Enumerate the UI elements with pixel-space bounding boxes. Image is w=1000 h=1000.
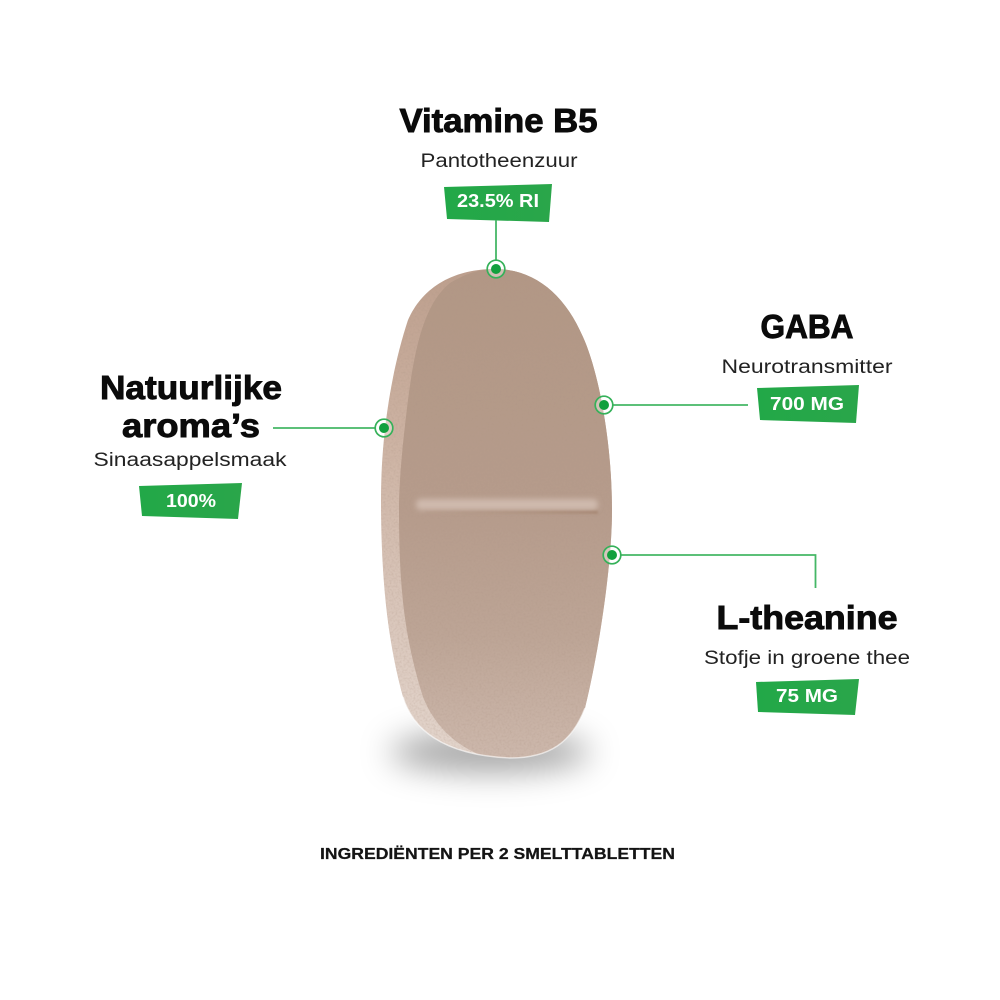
callout: L-theanine	[603, 546, 910, 715]
tablet shadow	[390, 732, 590, 772]
connector	[612, 404, 748, 406]
marker	[595, 396, 613, 414]
heading: Vitamine B5	[400, 102, 598, 139]
tablet grain	[381, 269, 612, 758]
tablet edge	[381, 269, 612, 758]
badge value: 100%	[166, 491, 216, 511]
subheading: Pantotheenzuur	[420, 151, 578, 172]
callout: GABA	[595, 308, 893, 423]
badge	[757, 385, 859, 423]
badge	[139, 483, 242, 519]
badge value: 23.5% RI	[457, 191, 539, 211]
badge	[756, 679, 859, 715]
tablet	[381, 269, 612, 772]
subheading: Stofje in groene thee	[704, 648, 910, 669]
subheading: Neurotransmitter	[722, 357, 893, 378]
callout: Vitamine B5	[400, 102, 598, 278]
callout: Natuurlijke aroma's	[94, 369, 393, 519]
heading: Natuurlijke	[100, 369, 282, 406]
connector	[620, 555, 816, 588]
connector	[495, 220, 497, 261]
heading: GABA	[760, 308, 854, 345]
marker	[603, 546, 621, 564]
badge value: 75 MG	[776, 686, 838, 706]
score line	[416, 499, 598, 514]
footer caption: INGREDIËNTEN PER 2 SMELTTABLETTEN	[320, 845, 675, 863]
tablet face	[399, 269, 612, 758]
callout: Natuurlijke aroma's: aroma’s	[122, 407, 260, 444]
badge value: 700 MG	[770, 394, 844, 414]
connector	[273, 427, 376, 429]
subheading: Sinaasappelsmaak	[94, 450, 287, 471]
marker	[487, 260, 505, 278]
heading: L-theanine	[716, 599, 898, 636]
badge	[444, 184, 552, 222]
marker	[375, 419, 393, 437]
bottom rim highlight	[403, 697, 585, 758]
